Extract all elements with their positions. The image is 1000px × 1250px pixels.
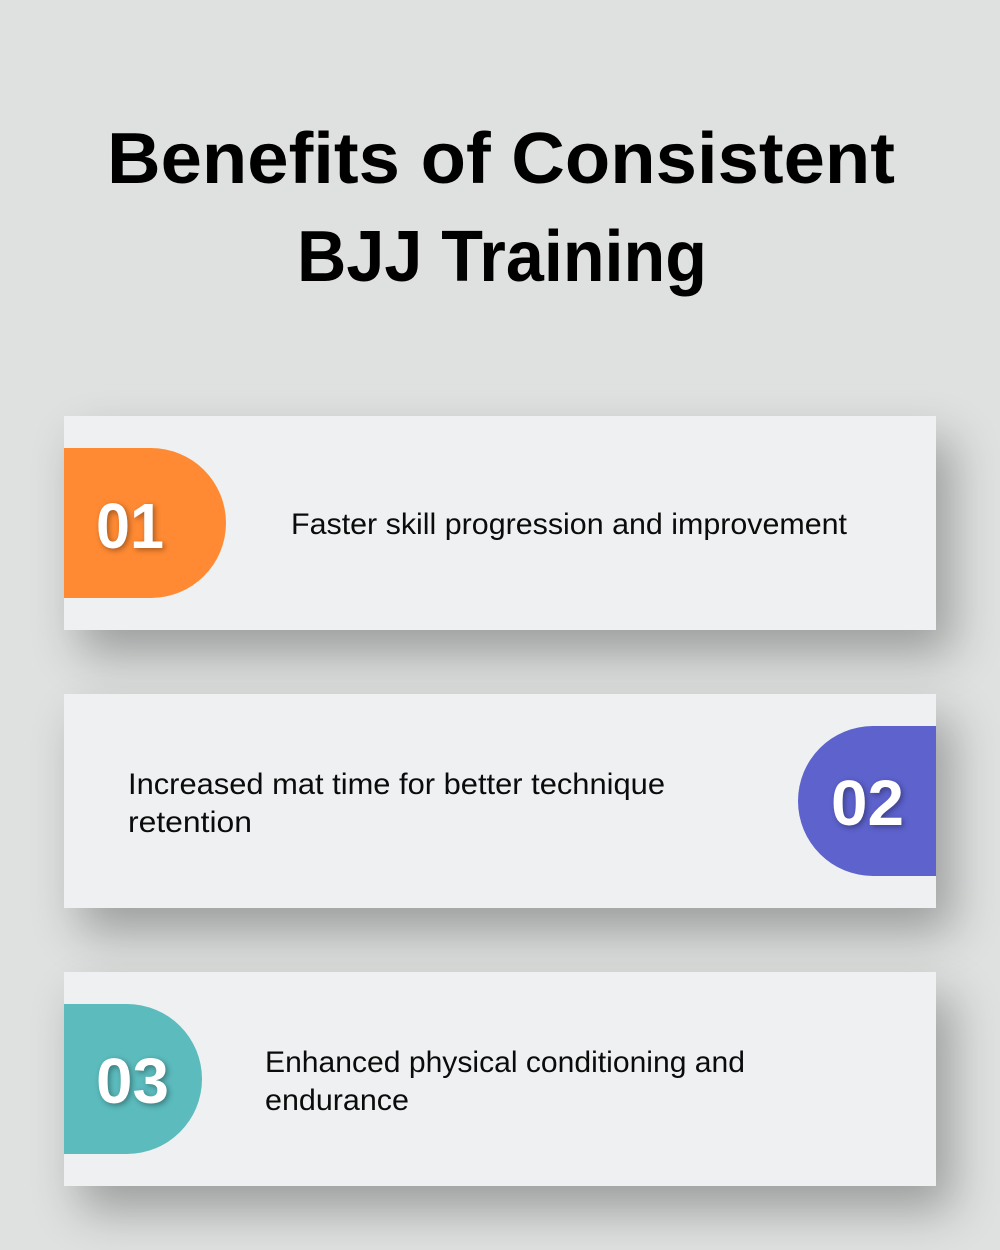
number badge 01: 01 <box>96 490 164 562</box>
number badge 03: endurance <box>265 1084 409 1117</box>
number badge 02: retention <box>128 806 252 839</box>
panel: benefit 01 <box>64 416 936 630</box>
title <box>107 119 895 297</box>
title: BJJ Training <box>297 217 707 297</box>
number badge 01: Faster skill progression and improvement <box>291 508 848 541</box>
panel: benefit 02 <box>64 694 936 908</box>
number badge 03 <box>64 1004 745 1154</box>
number badge 02: 02 <box>831 767 904 839</box>
number badge 02 <box>128 726 936 876</box>
title: Benefits of Consistent <box>107 119 895 199</box>
number badge 01 <box>64 448 848 598</box>
number badge 02: Increased mat time for better technique <box>128 768 665 801</box>
number badge 03: Enhanced physical conditioning and <box>265 1046 745 1079</box>
panel: benefit 03 <box>64 972 936 1186</box>
number badge 03: 03 <box>96 1045 169 1117</box>
